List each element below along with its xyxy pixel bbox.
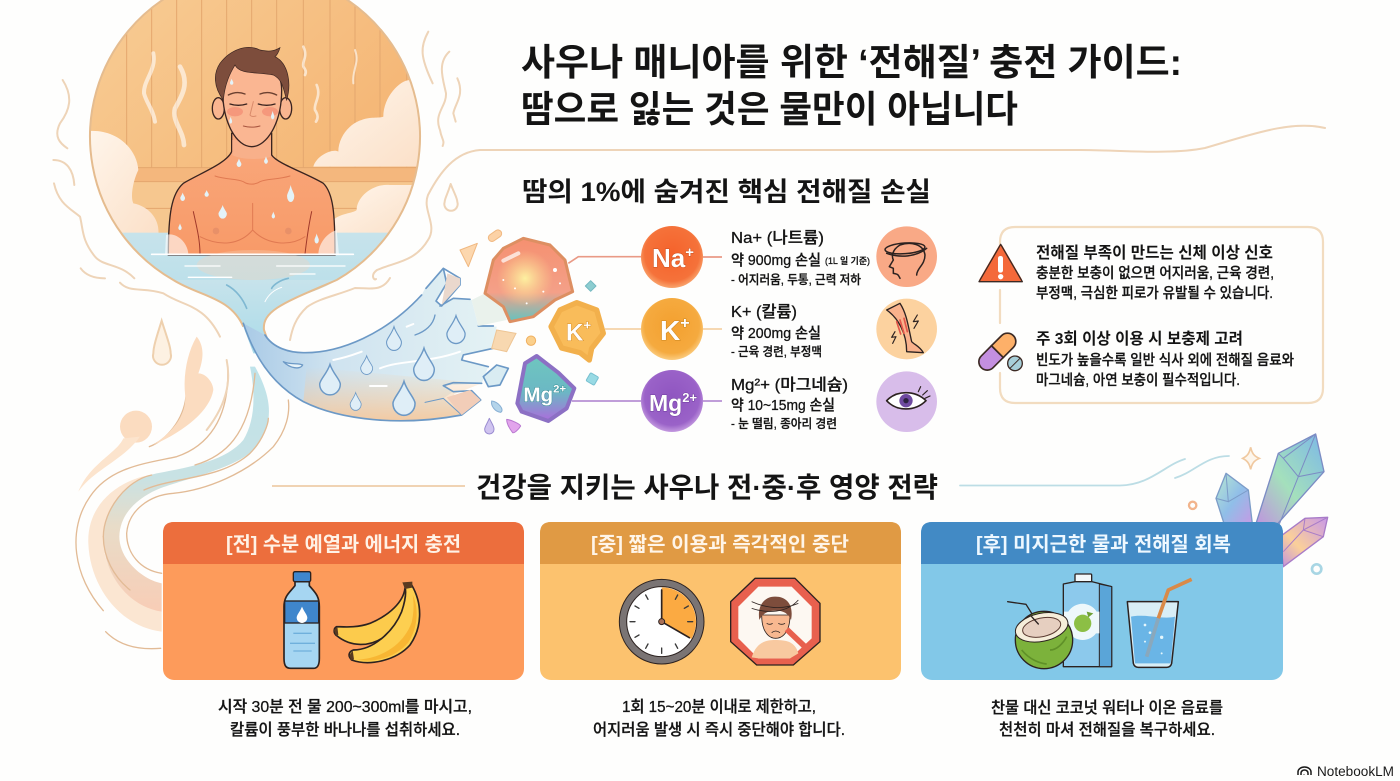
- magnesium badge: [641, 370, 703, 432]
- magnesium text: 약 10~15mg 손실: [731, 397, 835, 414]
- crystal: potassium: +: [583, 317, 591, 332]
- lower steam curve right of funnel: [290, 278, 390, 340]
- card: after sauna: [921, 522, 1283, 680]
- connector lines: [572, 257, 722, 401]
- potassium badge: +: [680, 315, 690, 332]
- warning text: [1036, 244, 1274, 302]
- magnesium text: - 눈 떨림, 종아리 경련: [731, 417, 837, 431]
- title: 땀으로 잃는 것은 물만이 아닙니다: [521, 89, 1018, 130]
- magnesium badge: 2+: [682, 390, 697, 405]
- icon: timer clock: [619, 579, 704, 664]
- tan steam wisps left of circle: [53, 80, 228, 430]
- warning text: 부정맥, 극심한 피로가 유발될 수 있습니다.: [1036, 285, 1273, 302]
- falling sweat drop outline: [153, 321, 171, 365]
- icon: water bottle: [284, 572, 319, 668]
- water funnel: [173, 280, 337, 353]
- card: during sauna: [중] 짧은 이용과 즉각적인 중단: [591, 533, 849, 556]
- potassium text: - 근육 경련, 부정맥: [731, 345, 822, 359]
- glass water wave with drops: [243, 228, 642, 434]
- magnesium badge: Mg: [649, 390, 682, 416]
- caption: before: 칼륨이 풍부한 바나나를 섭취하세요.: [230, 721, 460, 739]
- sodium badge: +: [685, 244, 694, 261]
- caption: during: 1회 15~20분 이내로 제한하고,: [622, 698, 816, 716]
- man in sauna: [168, 47, 335, 255]
- potassium text: K+ (칼륨): [731, 303, 797, 321]
- sodium text: [731, 229, 870, 287]
- icon: coconut: [1008, 602, 1073, 669]
- icon: supplement capsule: [975, 330, 1022, 374]
- card: after sauna: [후] 미지근한 물과 전해질 회복: [976, 533, 1231, 556]
- crystal: potassium: K: [566, 320, 583, 347]
- caption: after: 찬물 대신 코코넛 워터나 이온 음료를: [991, 699, 1223, 717]
- floating crystal shards: [460, 228, 599, 434]
- potassium text: 약 200mg 손실: [731, 325, 821, 342]
- card: before sauna: [163, 522, 524, 680]
- title: 사우나 매니아를 위한 ‘전해질’ 충전 가이드:: [521, 42, 1182, 83]
- caption: after: 천천히 마셔 전해질을 복구하세요.: [999, 721, 1215, 739]
- supplement text: 마그네슘, 아연 보충이 필수적입니다.: [1036, 372, 1240, 389]
- sauna circle illustration: [53, 0, 440, 445]
- potassium badge: [641, 298, 703, 360]
- supplement text: [1036, 330, 1294, 389]
- icon: warning triangle: [979, 244, 1022, 282]
- heading: electrolyte loss: 땀의 1%에 숨겨진 핵심 전해질 손실: [522, 177, 931, 207]
- sauna scene clipped to circle: [91, 0, 419, 293]
- card: during sauna: [540, 522, 901, 680]
- bottom-left flowing swirls: [76, 367, 289, 649]
- caption: during: [593, 698, 845, 739]
- icon: stop sign with dizzy man: [731, 578, 820, 665]
- crystal: magnesium: 2+: [553, 383, 566, 395]
- card: before sauna: [전] 수분 예열과 에너지 충전: [226, 533, 461, 556]
- steam wisps right of circle: [423, 32, 460, 211]
- sodium badge: Na: [652, 243, 685, 273]
- crystal: magnesium: [517, 356, 574, 421]
- potassium badge: K: [660, 315, 680, 346]
- potassium text: [731, 303, 822, 359]
- crystal: sodium: [485, 238, 642, 322]
- title: [521, 42, 1182, 130]
- peach flame: [153, 337, 213, 445]
- panel: body warning signals: [975, 227, 1323, 403]
- sodium text: 약 900mg 손실: [731, 252, 821, 269]
- icon: bananas: [334, 582, 420, 663]
- circle outline: [90, 0, 420, 280]
- wavy header divider line: [373, 126, 1325, 279]
- steam swirls: [144, 47, 357, 145]
- icon: coconut water carton: [1063, 574, 1112, 667]
- warning text: 전해질 부족이 만드는 신체 이상 신호: [1036, 244, 1273, 262]
- sodium text: Na+ (나트륨): [731, 229, 824, 247]
- icon: leg cramp: [876, 299, 937, 359]
- magnesium text: [731, 376, 848, 431]
- sodium text: (1L 일 기준): [825, 255, 870, 266]
- caption: during: 어지러움 발생 시 즉시 중단해야 합니다.: [593, 721, 845, 739]
- crystal: potassium: [551, 303, 603, 360]
- NotebookLM logo: NotebookLM: [1317, 764, 1394, 779]
- row: magnesium: [641, 370, 937, 432]
- heading: nutrition strategy: 건강을 지키는 사우나 전·중·후 영양 전략: [476, 472, 938, 503]
- icon: twitching eye: [876, 371, 937, 432]
- icon: dizzy head: [876, 226, 937, 287]
- caption: before: [218, 698, 472, 739]
- row: potassium: [641, 298, 937, 360]
- heading: nutrition strategy: [272, 456, 1229, 503]
- caption: after: [991, 699, 1223, 739]
- supplement text: 빈도가 높을수록 일반 식사 외에 전해질 음료와: [1036, 352, 1294, 369]
- sodium badge: [641, 226, 703, 288]
- crystals decoration top right: [1189, 434, 1328, 574]
- magnesium text: Mg²+ (마그네슘): [731, 376, 848, 394]
- icon: glass of water: [1127, 579, 1192, 667]
- row: sodium: [641, 226, 937, 288]
- warning text: 충분한 보충이 없으면 어지러움, 근육 경련,: [1036, 265, 1274, 282]
- sodium text: - 어지러움, 두통, 근력 저하: [731, 273, 861, 287]
- caption: before: 시작 30분 전 물 200~300ml를 마시고,: [218, 698, 472, 716]
- crystal: magnesium: Mg: [523, 384, 553, 407]
- supplement text: 주 3회 이상 이용 시 보충제 고려: [1036, 330, 1243, 348]
